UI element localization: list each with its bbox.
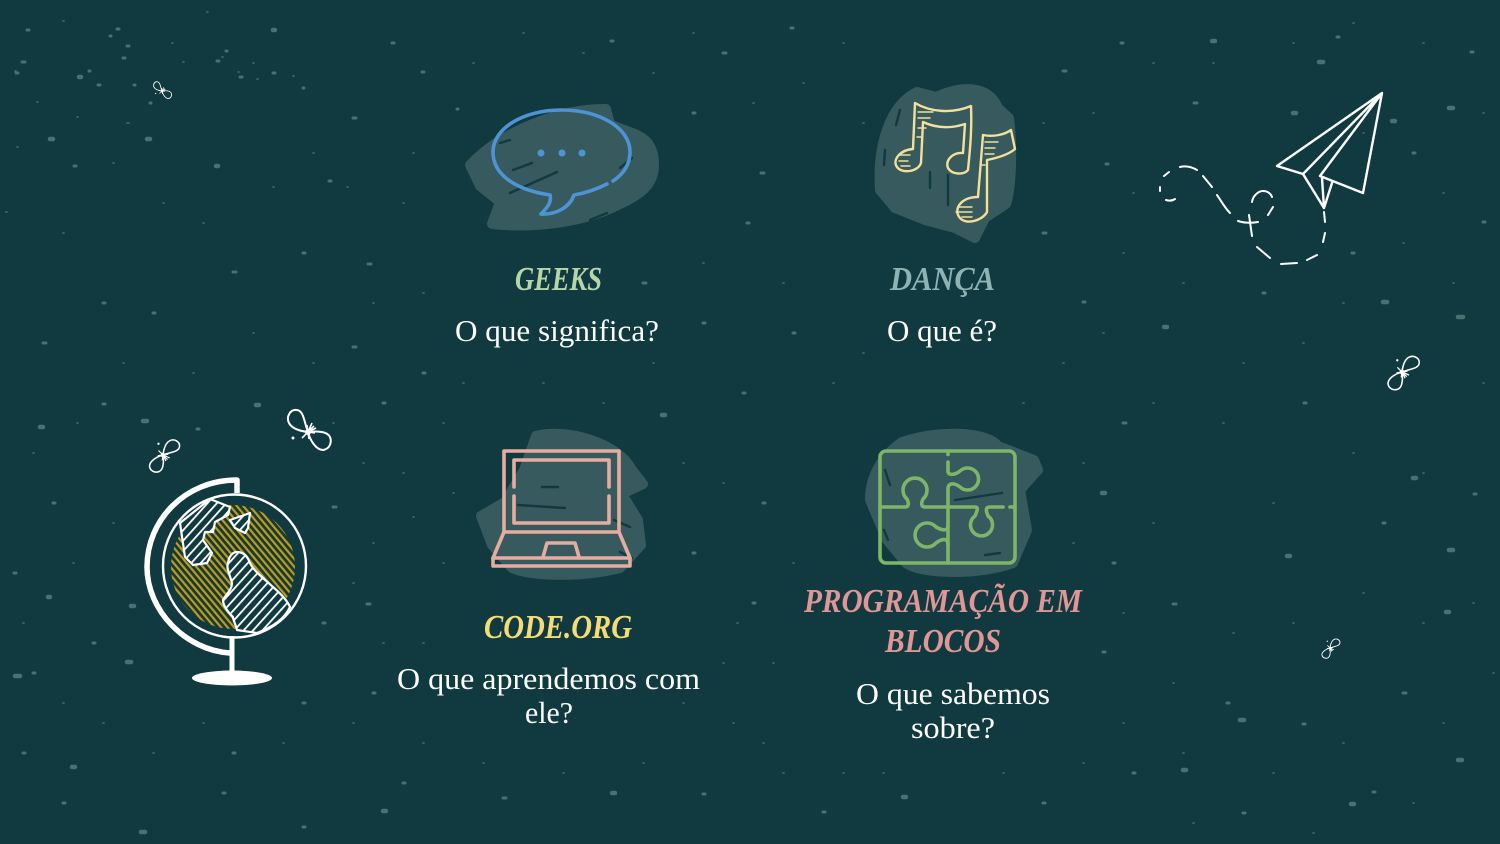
scribble: code.org — [481, 434, 643, 575]
decoration: butterfly top-left — [154, 82, 172, 99]
panel: dança — [880, 89, 1015, 348]
question: programação em blocos: O que sabemos — [856, 676, 1050, 711]
panel: geeks — [455, 109, 659, 348]
heading: dança: DANÇA — [889, 261, 995, 298]
icon: globe — [147, 480, 306, 686]
scribble: dança — [880, 89, 1011, 238]
scribble: programação em blocos — [870, 434, 1038, 572]
scribble: geeks — [470, 109, 654, 225]
question: geeks: O que significa? — [455, 313, 659, 348]
icon: paper plane with dashed trail — [1160, 93, 1382, 264]
question line 2: sobre? — [911, 710, 995, 745]
land masses — [180, 499, 290, 633]
heading: programação em blocos: PROGRAMAÇÃO EM — [803, 583, 1084, 620]
decoration: butterfly near globe right — [288, 410, 331, 450]
heading line 2: BLOCOS — [884, 623, 1001, 660]
decoration: butterfly lower right — [1322, 639, 1340, 658]
question: dança: O que é? — [887, 313, 997, 348]
icon: puzzle — [880, 451, 1015, 563]
icon: speech bubble — [493, 110, 630, 214]
heading: code.org: CODE.ORG — [484, 609, 632, 646]
heading: geeks: GEEKS — [515, 261, 602, 298]
question: code.org line 2: ele? — [525, 695, 573, 730]
question: code.org: O que aprendemos com — [397, 661, 700, 696]
icon: music notes — [895, 103, 1015, 222]
decoration: butterfly right — [1388, 356, 1419, 390]
icon: laptop — [493, 451, 630, 566]
panel: code.org — [397, 434, 700, 730]
decoration: butterfly near globe left — [150, 440, 180, 472]
panel: programação em blocos — [803, 434, 1084, 745]
